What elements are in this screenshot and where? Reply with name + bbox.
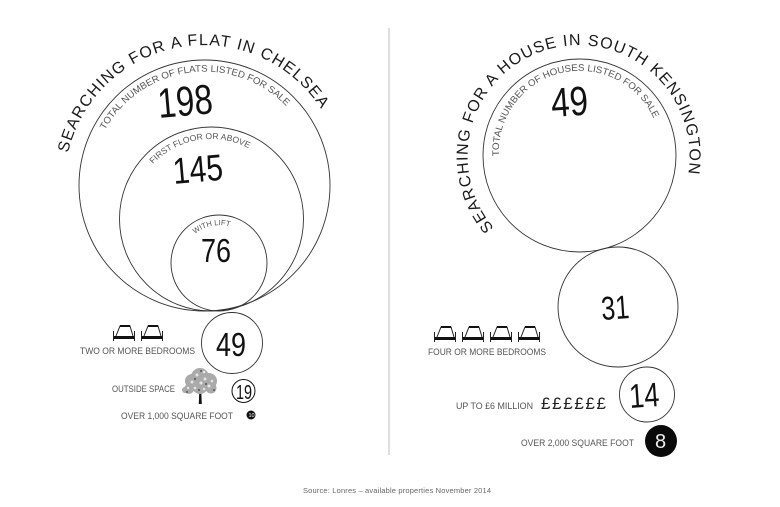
source note: Source: Lonres – available properties November 2014	[303, 486, 491, 495]
circle: 14: 14	[628, 376, 660, 416]
circle: 10: 10	[248, 413, 255, 419]
label: up to £6 million: UP TO £6 MILLION	[456, 401, 533, 411]
circle: first floor or above 145: FIRST FLOOR OR ABOVE	[149, 133, 251, 164]
icon: two beds	[114, 325, 162, 341]
circle: total flats 198: TOTAL NUMBER OF FLATS LISTED FOR SALE	[99, 65, 290, 128]
circle: 49: 49	[216, 326, 246, 363]
panel: houses in South Kensington	[428, 34, 701, 457]
circle: 14	[620, 367, 674, 422]
circle: with lift 76: 76	[201, 232, 231, 269]
circle: 8	[645, 425, 677, 457]
circle: 19	[232, 380, 255, 404]
panel: flats in Chelsea	[58, 34, 330, 421]
title: house in South Kensington: SEARCHING FOR A HOUSE IN SOUTH KENSINGTON	[456, 34, 701, 233]
label: over 2,000 square foot: OVER 2,000 SQUARE FOOT	[521, 438, 634, 448]
label: four or more bedrooms: FOUR OR MORE BEDROOMS	[428, 347, 546, 357]
icon: tree	[182, 368, 217, 404]
circle: first floor or above 145: 145	[171, 147, 225, 192]
circle: total flats 198: 198	[156, 75, 215, 127]
circle: 8: 8	[655, 431, 666, 453]
circle: total flats 198	[78, 60, 330, 312]
circle: with lift 76: WITH LIFT	[192, 220, 231, 233]
title: flat in Chelsea: SEARCHING FOR A FLAT IN CHELSEA	[58, 34, 328, 152]
circle: 31	[558, 247, 678, 367]
label: outside space: OUTSIDE SPACE	[112, 384, 175, 394]
circle: total houses 49	[482, 58, 676, 252]
circle: with lift 76	[170, 214, 268, 312]
label: over 1,000 square foot: OVER 1,000 SQUARE FOOT	[121, 411, 233, 421]
icon: pound signs: ££££££	[541, 394, 607, 413]
circle: total houses 49: TOTAL NUMBER OF HOUSES LISTED FOR SALE	[492, 64, 660, 156]
divider	[388, 28, 390, 455]
circle: first floor or above 145	[119, 126, 304, 312]
circle: 49	[202, 312, 262, 374]
circle: 31: 31	[600, 288, 630, 327]
icon: four beds	[434, 326, 540, 342]
circle: total houses 49: 49	[549, 78, 590, 126]
label: two or more bedrooms: TWO OR MORE BEDROOMS	[80, 346, 195, 356]
circle: 19: 19	[236, 382, 252, 404]
circle: 10	[246, 410, 256, 420]
